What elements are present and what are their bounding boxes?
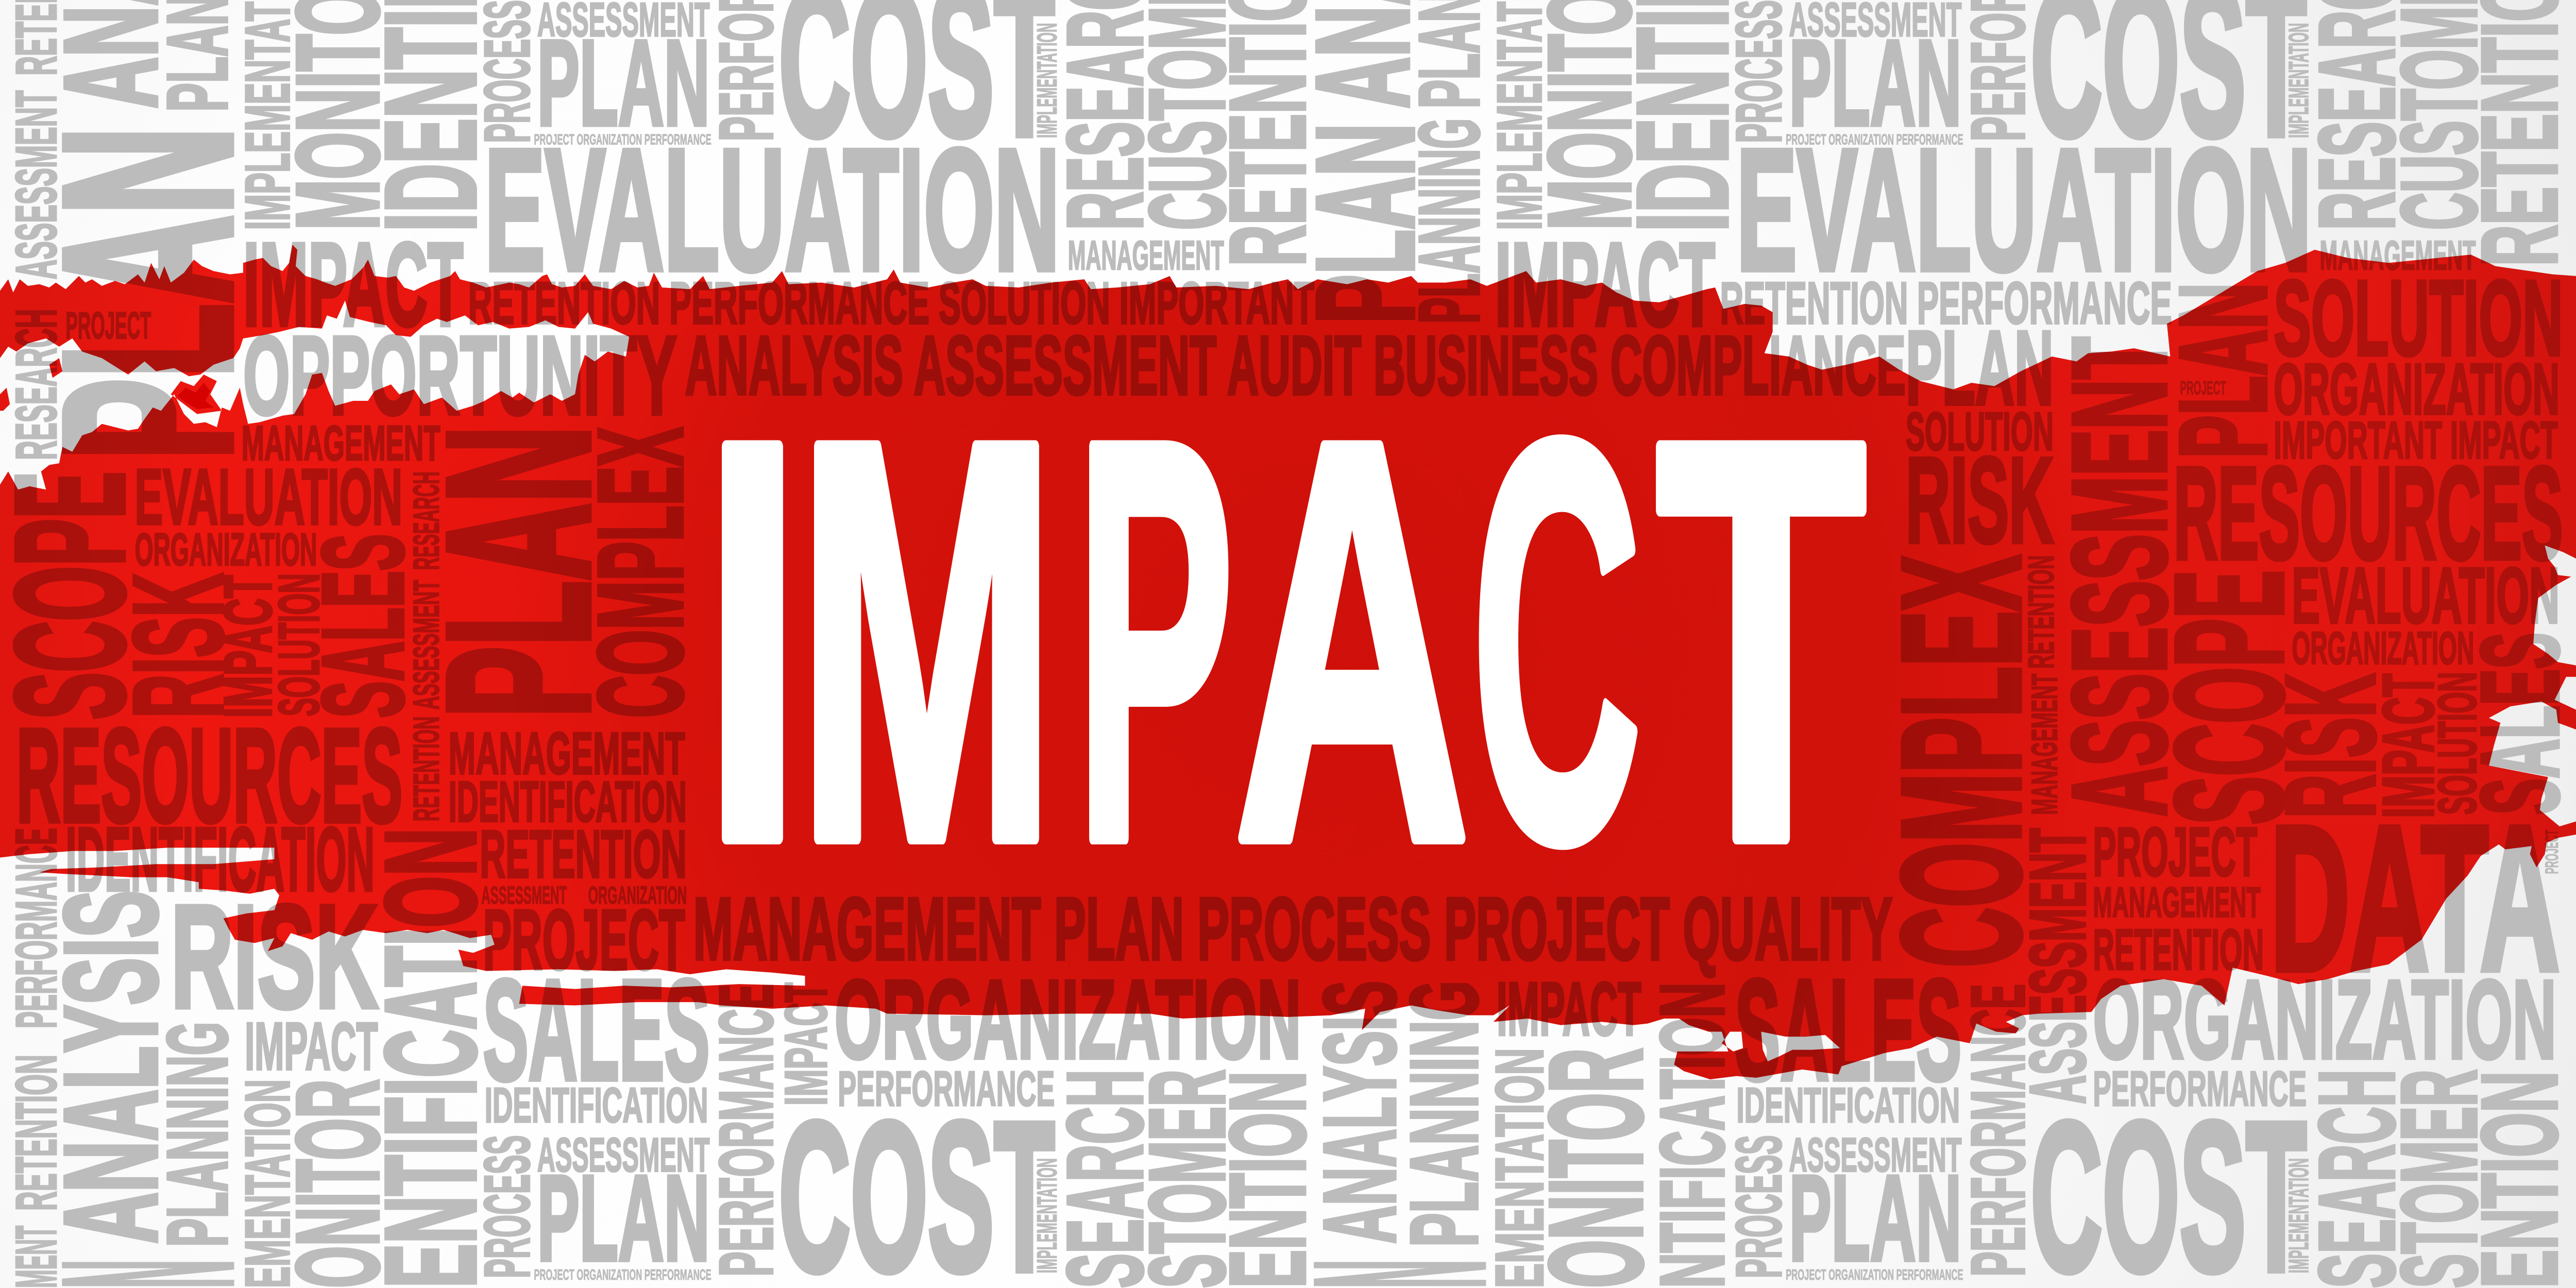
- word cloud: top left block: OPPORTUNITY: [243, 313, 677, 438]
- title: IMPACT: C: [1472, 323, 1641, 958]
- word cloud: left middle block: IMPACT: [210, 575, 285, 718]
- word cloud: bottom left block: IMPLEMENTATION: [1031, 1158, 1062, 1273]
- word cloud: left middle block: RETENTION: [480, 817, 687, 892]
- word cloud: bottom left block: PROCESS: [471, 1135, 543, 1278]
- word cloud: bottom left block: EMENTATION: [232, 1079, 302, 1288]
- word cloud: top left block: RETENTION PERFORMANCE SOLUTION IMPORTANT: [468, 270, 1314, 336]
- word cloud: bottom right block: NTIFICATION: [1642, 982, 1743, 1288]
- word cloud: bottom left block: IMPACT: [245, 1009, 378, 1084]
- word cloud: bottom right block: STOMER: [2379, 1070, 2498, 1288]
- word cloud: right middle block: SOLUTION: [1906, 402, 2054, 462]
- word cloud: bottom left block: ONITOR: [272, 1079, 402, 1288]
- word cloud: left middle block: SOLUTION: [267, 573, 331, 716]
- word cloud: top left block: RESEARCH: [4, 309, 68, 460]
- word cloud: bottom right block: SEARCH: [2297, 1070, 2416, 1288]
- word cloud: bottom left block: RISK: [171, 875, 378, 1039]
- word cloud: bottom right block: IMPLEMENTATION: [2283, 1158, 2314, 1273]
- word cloud: bottom left block: IDENTIFICATION: [485, 1078, 708, 1133]
- word cloud: bottom right block: PLANNING: [1392, 981, 1498, 1247]
- word cloud: top right block: IMPACT: [1495, 218, 1715, 350]
- word cloud: bottom left block: ENTION: [1208, 1071, 1327, 1288]
- word cloud: top right block: [1288, 0, 2576, 350]
- word cloud: right middle block: RISK: [2260, 673, 2401, 818]
- title: IMPACT: P: [1076, 323, 1234, 958]
- word cloud: bottom left block: PLAN: [537, 1150, 710, 1286]
- title: IMPACT: T: [1656, 323, 1866, 958]
- title: IMPACT: I: [702, 323, 803, 958]
- word cloud: bottom left block: PROJECT ORGANIZATION PERFORMANCE: [534, 1267, 711, 1283]
- word cloud: bottom right block: IMPACT: [1497, 967, 1641, 1052]
- word cloud: bottom left block: PLANNING: [150, 1022, 245, 1247]
- title: IMPACT: M: [797, 323, 1056, 958]
- word cloud: bottom right block: PERFORMANCE: [1956, 984, 2041, 1277]
- word cloud: right middle block: PROJECT: [2180, 377, 2226, 398]
- word cloud: right middle block: PROJECT: [2542, 829, 2562, 874]
- word cloud: right middle block: MANAGEMENT: [2024, 673, 2064, 815]
- word cloud: right middle block: SCOPE: [2144, 570, 2314, 825]
- word cloud: left middle block: RESOURCES: [16, 701, 402, 850]
- red torn paint brush stroke: [0, 245, 2576, 1079]
- word cloud: bottom left block: MENT: [4, 1226, 68, 1288]
- word cloud: bottom right block: ANALYSIS: [1302, 981, 1416, 1244]
- word cloud: bottom right block: ONITOR: [1523, 1048, 1670, 1288]
- word cloud: left middle block: MANAGEMENT: [449, 721, 685, 787]
- word cloud: right middle block: RETENTION: [2021, 555, 2061, 669]
- word cloud: bottom right block: IDENTIFICATION: [1737, 1078, 1960, 1133]
- word cloud: bottom left block: SALES: [483, 950, 710, 1110]
- word cloud: right middle block: RETENTION: [2093, 917, 2264, 981]
- word cloud: bottom right block: SALES: [1735, 950, 1961, 1110]
- word cloud: left middle block: ORGANIZATION: [588, 882, 687, 909]
- word cloud: right middle block: PROJECT: [2093, 814, 2257, 891]
- word cloud: left middle block: SALES: [299, 534, 427, 718]
- word cloud: bottom right block: [1266, 950, 2576, 1288]
- word cloud: left middle block: PROJECT: [483, 892, 685, 988]
- word cloud: top left block: PROJECT: [66, 304, 151, 347]
- word cloud: bottom left block: ENTIFICATION: [359, 828, 502, 1288]
- word cloud: bottom left block: ANALYSIS: [38, 890, 184, 1244]
- word cloud: bottom left block: STOMER: [1127, 1070, 1247, 1288]
- word cloud: top left block: PROJECT ORGANIZATION PERFORMANCE: [534, 132, 711, 148]
- word cloud: bottom right block: EMENTATION: [1482, 1048, 1557, 1288]
- word cloud: bottom left block: PERFORMANCE: [704, 984, 789, 1277]
- word cloud: top right block: PROJECT ORGANIZATION PERFORMANCE: [1786, 132, 1963, 148]
- word cloud: bottom left block: IDENTIFICATION: [66, 809, 375, 910]
- word cloud: left middle block: MANAGEMENT: [242, 416, 440, 471]
- red paint fragments in left tear: [0, 358, 214, 411]
- word cloud: bottom left block: SEARCH: [1045, 1070, 1164, 1288]
- title: IMPACT: A: [1234, 323, 1470, 958]
- word cloud: bottom right block: PROJECT ORGANIZATION PERFORMANCE: [1786, 1267, 1963, 1283]
- word cloud: bottom right block: PLAN: [1789, 1150, 1961, 1286]
- word cloud: bottom left block: ORGANIZATION: [835, 957, 1301, 1082]
- word cloud: right middle block: PLAN: [1906, 309, 2054, 427]
- word cloud: bottom right block: ASSESSMENT: [1789, 1128, 1961, 1182]
- word cloud: top left block: MANAGEMENT: [1068, 232, 1224, 278]
- word cloud: bottom left block: N: [14, 1260, 280, 1288]
- word cloud: left middle block: PLAN: [406, 426, 632, 718]
- word cloud: top right block: PLAN: [1789, 15, 1961, 151]
- word cloud: bottom left block: RETENTION: [4, 1055, 68, 1211]
- word cloud: bottom right block: PROCESS: [1723, 1135, 1795, 1278]
- word cloud: left middle block: EVALUATION: [134, 453, 402, 541]
- word cloud: left middle block: ORGANIZATION: [134, 523, 317, 575]
- word cloud: right middle block: ASSESSMENT: [2014, 828, 2102, 1104]
- word cloud: right middle block: COMPLEX: [1868, 555, 2055, 968]
- word cloud: right middle block: MANAGEMENT: [2093, 878, 2261, 926]
- word cloud: right middle block: SOLUTION: [2427, 672, 2487, 815]
- word cloud: bottom left block: ASSESSMENT: [537, 1128, 710, 1182]
- word cloud: top left block: PLAN: [537, 15, 710, 151]
- word cloud: bottom right block: ENTION: [2460, 1071, 2576, 1288]
- word cloud: bottom right block: PERFORMANCE: [2093, 1061, 2307, 1116]
- word cloud: left middle block: RESEARCH: [405, 471, 446, 570]
- word cloud: left middle block: [0, 416, 707, 988]
- word cloud: bottom left block: PERFORMANCE: [838, 1061, 1055, 1116]
- word cloud: bottom left block: IMPACT: [773, 982, 839, 1106]
- word cloud: left middle block: IDENTIFICATION: [449, 769, 687, 834]
- word cloud: right middle block: [1868, 258, 2576, 1104]
- word cloud: right middle block: IMPACT: [2368, 673, 2449, 818]
- word cloud: PERFORMANCE: [4, 828, 68, 1028]
- word cloud: right middle block: PLAN: [2154, 282, 2292, 459]
- word cloud: top left block: EVALUATION: [485, 113, 1060, 306]
- word cloud: bottom right block: N: [1266, 1260, 1532, 1288]
- word cloud: left middle block: RISK: [108, 573, 249, 718]
- word cloud: left middle block: ASSESSMENT: [405, 580, 446, 710]
- word cloud: top right block: RETENTION PERFORMANCE: [1720, 270, 2172, 336]
- word cloud: top left block: [4, 0, 1327, 460]
- word cloud: top left block: IMPACT: [243, 218, 463, 350]
- word cloud: left middle block: RETENTION: [405, 716, 446, 821]
- word cloud: left middle block: ASSESSMENT: [481, 882, 567, 909]
- word cloud: bottom left block: [4, 809, 1327, 1288]
- word cloud: right middle block: RISK: [1906, 432, 2054, 568]
- word cloud: left middle block: COMPLEX: [573, 427, 707, 718]
